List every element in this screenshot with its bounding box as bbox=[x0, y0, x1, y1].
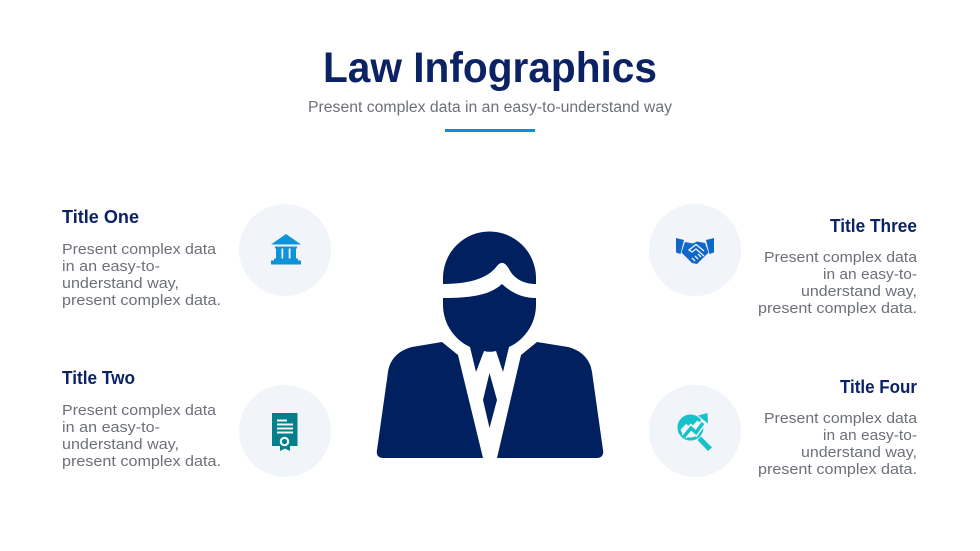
panel: title two bbox=[62, 368, 221, 470]
heading: title one: Title One bbox=[62, 207, 139, 227]
panel: title four bbox=[758, 377, 918, 478]
text block: title one: in an easy-to- bbox=[62, 258, 160, 275]
text block: title one: present complex data. bbox=[62, 292, 221, 309]
icon: handshake bbox=[649, 204, 741, 296]
icon: certificate document bbox=[239, 385, 331, 477]
text block: title three: in an easy-to- bbox=[823, 266, 917, 283]
text block: title one: understand way, bbox=[62, 275, 179, 292]
text block: title four bbox=[758, 410, 918, 478]
text block: title two: Present complex data bbox=[62, 402, 217, 419]
heading: title two: Title Two bbox=[62, 368, 135, 388]
title: Law Infographics bbox=[323, 44, 657, 92]
text block: title four: understand way, bbox=[801, 444, 917, 461]
text block: title two: understand way, bbox=[62, 436, 179, 453]
heading: title four: Title Four bbox=[840, 377, 917, 397]
text block: title two: present complex data. bbox=[62, 453, 221, 470]
text block: title three bbox=[758, 249, 918, 317]
face bbox=[443, 284, 536, 372]
tie bbox=[483, 373, 497, 428]
panel: title three bbox=[758, 216, 918, 317]
title underline bbox=[445, 129, 535, 132]
text block: title three: understand way, bbox=[801, 283, 917, 300]
text block: title four: present complex data. bbox=[758, 461, 917, 478]
text block: title two: in an easy-to- bbox=[62, 419, 160, 436]
central figure: lawyer bbox=[377, 232, 603, 458]
heading: title three: Title Three bbox=[830, 216, 917, 236]
icon: magnifier with growth arrow bbox=[649, 385, 741, 477]
hair bbox=[443, 232, 536, 284]
text block: title four: Present complex data bbox=[764, 410, 918, 427]
panel: title one bbox=[62, 207, 221, 309]
text block: title two bbox=[62, 402, 221, 470]
left jacket bbox=[377, 342, 483, 458]
text block: title four: in an easy-to- bbox=[823, 427, 917, 444]
text block: title three: Present complex data bbox=[764, 249, 918, 266]
subtitle: Present complex data in an easy-to-understand way bbox=[308, 99, 672, 116]
text block: title one bbox=[62, 241, 221, 309]
right jacket bbox=[497, 342, 603, 458]
icon: courthouse bbox=[239, 204, 331, 296]
text block: title one: Present complex data bbox=[62, 241, 217, 258]
text block: title three: present complex data. bbox=[758, 300, 917, 317]
